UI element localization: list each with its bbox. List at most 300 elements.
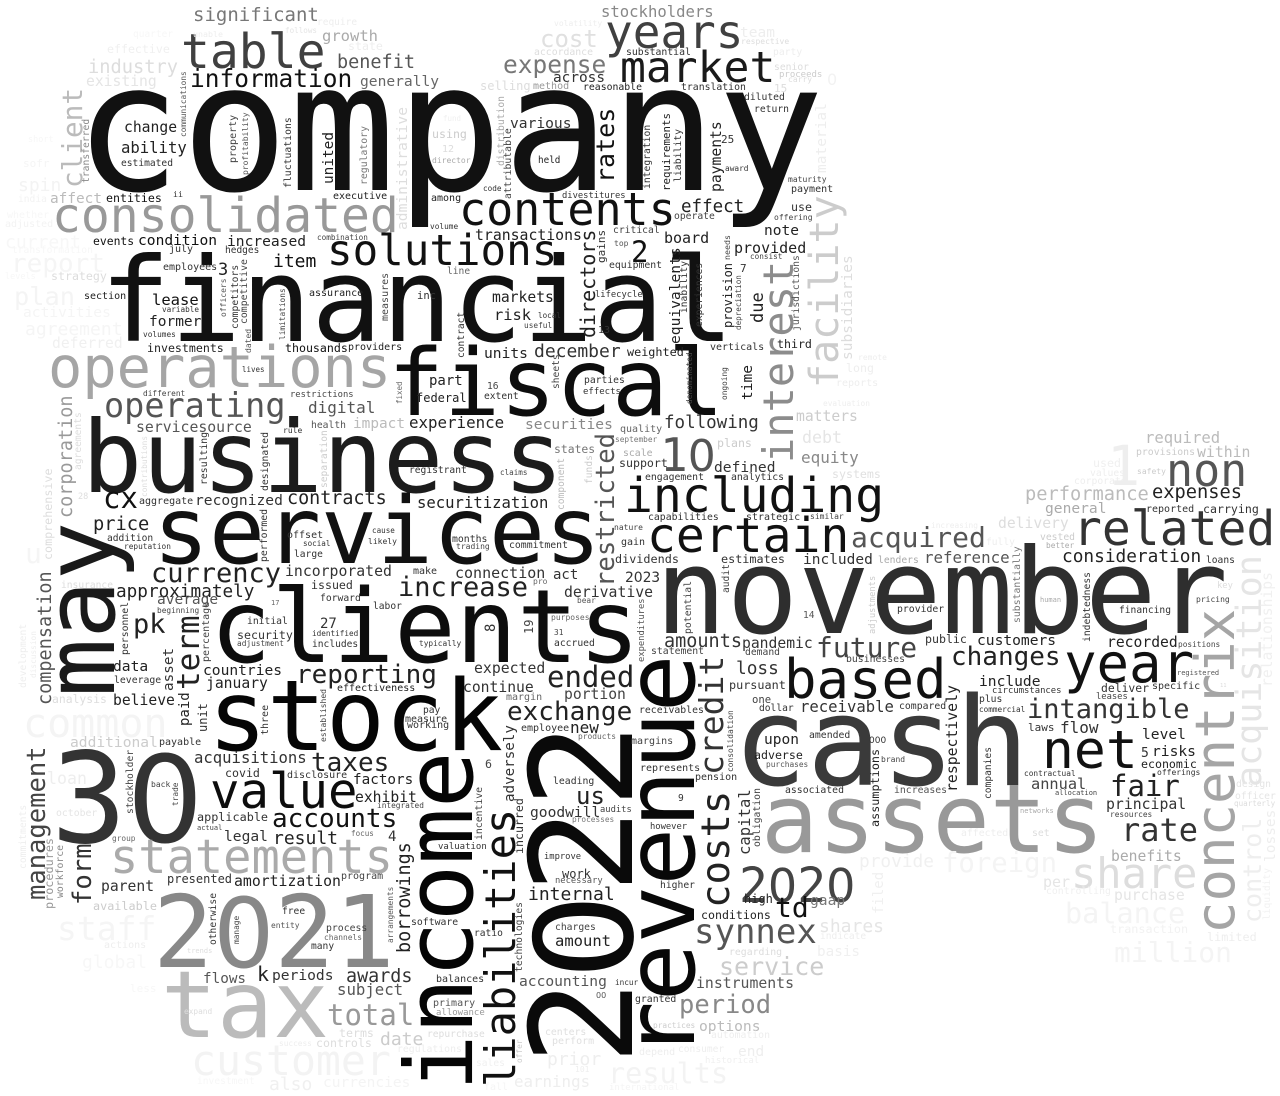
small terms: top centre: diluted (744, 92, 785, 103)
small terms: middle centre: expected (474, 660, 545, 677)
small terms: middle centre: capabilities (648, 512, 719, 523)
small terms: middle centre: trading (456, 542, 490, 551)
small terms: bottom left: controls (316, 1036, 372, 1050)
small terms: bottom centre: international (609, 1083, 679, 1093)
small terms: middle left: effectiveness (337, 683, 415, 694)
small terms: bottom centre: incur (615, 978, 639, 987)
small terms: bottom left: also (269, 1074, 312, 1095)
small terms: middle left: initial (247, 616, 288, 627)
small terms: bottom left: amortization (234, 873, 341, 890)
small terms: top centre: markets (492, 289, 554, 306)
small terms: top left: lease (152, 291, 199, 309)
small terms: right side: expenses (1152, 482, 1242, 503)
medium terms, vertical: term (171, 615, 207, 690)
small terms: bottom centre: products (578, 732, 616, 741)
word: 30: 30 (51, 725, 203, 872)
medium terms, horizontal: plan (14, 282, 75, 311)
small terms: bottom left: awards (346, 966, 412, 987)
small terms: top centre: divestitures (562, 191, 626, 201)
small terms: middle centre: audit (721, 564, 732, 593)
small terms: right side: corporate (1074, 476, 1127, 487)
medium terms, horizontal: statements (110, 830, 393, 885)
small terms: middle left (18, 365, 548, 742)
small terms: middle centre: statement (651, 646, 704, 657)
small terms: top left: affect (50, 191, 102, 207)
small terms: middle left: approximately (116, 582, 254, 602)
small terms: bottom centre: software (411, 917, 458, 928)
small terms: bottom left: global (82, 952, 147, 973)
small terms: right side: circumstances (992, 686, 1061, 696)
small terms: bottom left: expand (184, 1007, 212, 1016)
small terms: top centre: award (725, 164, 748, 173)
small terms: bottom centre: offer (515, 1039, 524, 1063)
medium terms, horizontal: information (190, 64, 352, 93)
small terms: right side: per (1043, 873, 1070, 891)
word: consolidated: consolidated (52, 188, 399, 244)
small terms: top left: july (169, 244, 193, 255)
small terms: right side (736, 353, 1279, 960)
small terms: top centre: inability (679, 261, 690, 313)
medium terms, horizontal: 10 (660, 428, 716, 482)
medium terms, horizontal: acquired (851, 521, 986, 554)
small terms: bottom centre: ratio (474, 928, 503, 939)
medium terms, horizontal: currency (151, 558, 281, 589)
small terms: top centre: equivalents (667, 247, 684, 344)
medium terms, horizontal: years (605, 5, 743, 59)
small terms: middle centre: expenditures (637, 598, 647, 662)
small terms: top centre: equipment (609, 260, 662, 271)
small terms: right side: upon (764, 732, 799, 748)
small terms: bottom left: stockholder (125, 750, 136, 814)
small terms: middle centre: following (664, 413, 759, 433)
small terms: right side: assumptions (868, 749, 882, 827)
word: clients: clients (210, 568, 640, 687)
small terms: bottom centre: options (699, 1018, 761, 1035)
small terms: bottom centre: amount (555, 932, 611, 950)
word: concentrix: concentrix (1184, 609, 1247, 934)
small terms: right side: liquidity (1262, 868, 1273, 920)
small terms: top left: growth (322, 27, 378, 45)
small terms: right side: key (1217, 581, 1233, 591)
small terms: middle left: personnel (120, 602, 131, 655)
small terms: right side: principal (1106, 796, 1186, 813)
small terms: right side: obligation (752, 788, 763, 847)
small terms: top centre: selling (480, 79, 531, 93)
small terms: top centre: board (664, 229, 709, 247)
word: assets: assets (761, 765, 1104, 875)
small terms: top centre: december (534, 341, 621, 362)
medium terms, horizontal: us (576, 782, 605, 810)
small terms: right side: evaluation (823, 399, 870, 408)
small terms: middle left: believe (113, 692, 175, 709)
medium terms, horizontal: td (775, 891, 809, 924)
small terms: middle centre: effects (583, 387, 621, 397)
small terms: bottom left: commitments (18, 805, 29, 869)
small terms: top centre: liability (673, 129, 684, 182)
small terms: bottom left: additional (70, 734, 158, 751)
small terms: top centre: units (484, 345, 528, 362)
small terms: top left: item (273, 251, 316, 272)
small terms: top centre: requirements (660, 113, 673, 191)
small terms: bottom left: result (273, 828, 338, 849)
small terms: top centre: 0 (827, 70, 837, 89)
small terms: top left: regulatory (359, 126, 370, 185)
small terms: top left: communications (179, 71, 188, 137)
small terms: right side: required (1145, 429, 1220, 447)
small terms: middle centre: analytics (731, 472, 784, 483)
small terms: right side: include (979, 673, 1041, 690)
small terms: right side: companies (983, 747, 994, 799)
small terms: top centre: weighted (627, 345, 684, 359)
small terms: right side: within (1197, 444, 1250, 461)
small terms: top left: inc (417, 290, 436, 302)
small terms: right side: limited (1207, 930, 1257, 944)
medium terms, horizontal: including (624, 468, 884, 524)
small terms: top left: whether (7, 210, 49, 221)
small terms: top centre: top (614, 239, 629, 248)
small terms: bottom centre: adversely (502, 725, 518, 802)
small terms: middle left: restrictions (290, 390, 354, 400)
small terms: middle left: aggregate (139, 496, 193, 507)
small terms: middle left: insurance (61, 580, 113, 591)
small terms: right side: risks (1152, 743, 1196, 760)
small terms: top left: transferred (81, 119, 92, 183)
small terms: right side: affected (961, 828, 1008, 839)
small terms: middle left: beginning (157, 606, 199, 615)
medium terms, horizontal: 2 (631, 235, 648, 269)
word: company: company (74, 25, 824, 232)
small terms: middle centre: securities (525, 416, 613, 433)
small terms: right side: amended (809, 730, 850, 741)
medium terms, vertical: management (22, 746, 52, 900)
small terms: middle centre: amounts (664, 631, 742, 652)
small terms: middle centre: purposes (551, 613, 590, 622)
small terms: top centre: 12 (442, 144, 454, 155)
medium terms, horizontal: customer (191, 1036, 391, 1085)
small terms: right side: compared (899, 701, 946, 712)
small terms: bottom left: workforce (55, 845, 66, 898)
small terms: middle centre: september (615, 435, 658, 444)
small terms: top centre: consist (750, 252, 782, 261)
small terms: bottom left: date (380, 1029, 423, 1050)
small terms: bottom centre: internal (528, 884, 615, 905)
small terms: middle left: discussion (29, 631, 38, 678)
small terms: top centre: method (533, 81, 569, 92)
small terms: right side: losses (1263, 810, 1279, 862)
medium terms, horizontal: staff (57, 909, 156, 948)
small terms: middle centre: component (556, 458, 567, 510)
small terms: middle left: recognized (195, 492, 283, 509)
small terms: right side: carrying (1203, 502, 1259, 516)
medium terms, vertical: borrowings (394, 842, 415, 953)
small terms: middle left: digital (308, 398, 375, 417)
small terms: middle left: large (294, 549, 323, 560)
small terms: top centre: jurisdictions (791, 255, 802, 331)
small terms: right side: officer (1235, 791, 1276, 802)
small terms: middle left: incorporated (285, 563, 392, 580)
small terms: top left: change (124, 119, 177, 136)
small terms: right side: 000 (869, 736, 886, 746)
small terms: bottom left: channels (324, 933, 362, 942)
small terms: top left: events (93, 234, 134, 248)
medium terms, horizontal: certain (647, 508, 849, 564)
small terms: middle left: separation (319, 430, 330, 488)
medium terms, horizontal: based (784, 648, 947, 711)
small terms: bottom centre: 101 (575, 1065, 590, 1074)
small terms: right side: general (1045, 500, 1107, 517)
small terms: middle centre: engagement (645, 472, 704, 483)
small terms: middle centre: equity (801, 448, 859, 467)
small terms: middle centre: scale (623, 448, 653, 459)
small terms: middle left: designated (260, 432, 271, 491)
small terms: top left: condition (138, 232, 217, 249)
small terms: right side: substantially (1012, 546, 1023, 623)
small terms: right side: laws (1028, 721, 1054, 734)
small terms: top centre: 25 (721, 133, 734, 146)
small terms: middle left: health (311, 420, 346, 431)
small terms: middle centre: margin (506, 692, 542, 703)
medium terms, horizontal: cx (103, 481, 138, 515)
small terms: top centre: return (754, 104, 789, 115)
small terms: middle centre: extent (484, 391, 519, 402)
small terms: top centre: fund (443, 114, 461, 123)
medium terms, horizontal: market (620, 43, 775, 93)
small terms: top left: profitability (241, 112, 250, 175)
small terms: bottom centre: automation (711, 1030, 770, 1041)
small terms: top left: dated (244, 329, 253, 353)
small terms: top centre: team (740, 25, 775, 41)
small terms: bottom centre: historical (705, 1056, 759, 1066)
medium terms, vertical: control (1238, 818, 1267, 923)
small terms: right side: provider (897, 604, 944, 615)
medium terms, horizontal: table (181, 24, 326, 80)
small terms: right side: recorded (1107, 634, 1178, 651)
small terms: top left: administrative (394, 107, 411, 230)
small terms: top centre: party (773, 47, 802, 58)
word: income: income (386, 751, 495, 1091)
medium terms, horizontal: total (327, 998, 414, 1032)
medium terms, horizontal: cost (540, 25, 598, 53)
small terms: middle left: resulting (199, 432, 210, 485)
small terms: middle left: identified (312, 629, 358, 638)
small terms: top left: unable (193, 29, 223, 39)
small terms: top centre: 7 (740, 262, 747, 275)
small terms: bottom left: factors (353, 772, 413, 788)
small terms: right side: reported (1146, 504, 1194, 515)
small terms: bottom centre: prior (547, 1049, 601, 1070)
small terms: bottom left: group (112, 834, 136, 843)
small terms: middle centre: part (429, 373, 463, 389)
small terms: right side: reference (924, 548, 1010, 567)
small terms: bottom centre: high (744, 892, 773, 906)
small terms: right side: positions (1178, 640, 1220, 649)
medium terms, horizontal: value (210, 763, 358, 820)
small terms: right side: remote (858, 353, 887, 362)
small terms: bottom centre: instruments (696, 975, 794, 992)
small terms: top centre: transactions (475, 227, 582, 244)
word: tax: tax (161, 951, 329, 1059)
small terms: bottom left: manage (232, 916, 241, 944)
small terms: bottom left: many (311, 941, 334, 952)
small terms: right side: capital (736, 789, 754, 855)
small terms: right side: flow (1060, 718, 1099, 737)
small terms: top left: transformation (12, 245, 93, 256)
small terms: bottom left: program (341, 871, 383, 882)
small terms: right side: specific (1152, 681, 1200, 692)
small terms: middle centre: funds (584, 455, 595, 484)
small terms: bottom centre: necessary (555, 876, 603, 886)
small terms: top left: competitors (230, 265, 241, 329)
small terms: middle centre: claims (500, 468, 527, 477)
small terms: right side: annual (1031, 775, 1086, 793)
small terms: middle centre: demand (745, 647, 780, 658)
small terms: middle left: analysis (52, 692, 107, 706)
small terms: middle left: development (18, 624, 29, 688)
small terms: top left: combination (317, 233, 368, 242)
small terms: middle left: make (413, 566, 437, 577)
small terms: right side: 5 (1141, 746, 1149, 761)
small terms: top centre: time (740, 365, 756, 400)
small terms: right side: filed (871, 872, 887, 914)
small terms: top left: benefit (337, 52, 415, 73)
small terms: middle centre: one (752, 694, 771, 706)
small terms: top left: activities (23, 304, 111, 321)
small terms: middle left: price (93, 514, 149, 535)
small terms: top centre: gains (595, 230, 608, 263)
word: may: may (24, 522, 137, 697)
small terms: bottom centre: earnings (514, 1072, 590, 1091)
small terms: right side: provide (859, 851, 934, 872)
small terms: bottom centre: conditions (701, 908, 771, 922)
small terms: middle centre: connection (455, 564, 545, 582)
small terms: bottom left: presented (167, 872, 232, 886)
word: cash: cash (733, 672, 1029, 815)
small terms: right side: delivery (998, 515, 1069, 532)
small terms: right side: relationships (1259, 572, 1276, 687)
word: stock: stock (208, 660, 503, 774)
small terms: middle centre: receivable (800, 698, 894, 716)
small terms: right side: indicate (820, 931, 866, 942)
small terms: top centre: attributable (503, 128, 514, 199)
small terms: top centre: director (432, 156, 471, 165)
small terms: top centre: various (510, 115, 572, 132)
small terms: bottom centre: fall (484, 1082, 508, 1093)
medium terms, horizontal: related (1073, 501, 1275, 557)
small terms: bottom centre: represents (640, 763, 700, 774)
small terms: middle left: agreements (73, 412, 84, 470)
small terms: top left: competitive (239, 259, 250, 324)
small terms: top left: increased (227, 233, 306, 250)
small terms: bottom centre: work (562, 867, 592, 881)
small terms: middle left: 28 (78, 492, 88, 502)
small terms: top left: assurance (309, 288, 363, 299)
small terms: bottom left: applicable (197, 810, 268, 824)
small terms: bottom centre: depend (639, 1047, 675, 1058)
word: 2021: 2021 (153, 874, 395, 991)
small terms: bottom centre: perform (552, 1036, 594, 1047)
medium terms, horizontal: year (1064, 632, 1194, 695)
small terms: bottom left: legal (224, 828, 268, 845)
small terms: top left: strategy (51, 269, 107, 283)
medium terms, horizontal: service (719, 952, 824, 981)
small terms: top centre: contract (456, 312, 467, 358)
medium terms, horizontal: rate (1121, 811, 1198, 849)
small terms: right side: level (1142, 726, 1186, 743)
small terms: middle centre: dividends (615, 552, 679, 566)
small terms: middle left: average (157, 592, 218, 608)
small terms: top left: spin (18, 175, 61, 196)
small terms: bottom centre: centers (545, 1027, 586, 1038)
small terms: right side: public (925, 632, 967, 646)
small terms: bottom left: trends (187, 947, 212, 955)
small terms: right side: 11 (1220, 683, 1227, 689)
small terms: top centre: third (777, 337, 812, 351)
small terms: middle left: countries (203, 662, 282, 679)
medium terms, horizontal: share (1071, 849, 1197, 898)
small terms: middle centre: included (803, 552, 873, 568)
small terms: bottom centre: accounting (519, 973, 607, 990)
small terms: bottom left: less (130, 982, 156, 995)
small terms: top left: generally (360, 73, 439, 90)
medium terms, horizontal: 2020 (739, 858, 855, 914)
small terms: right side: purchase (1114, 887, 1185, 904)
small terms: bottom left: terms (339, 1026, 374, 1040)
small terms: bottom centre: balances (436, 974, 484, 985)
small terms: middle left: likely (368, 537, 397, 546)
small terms: top left: investments (147, 341, 224, 355)
small terms: bottom centre: repurchase (427, 1029, 485, 1040)
medium terms, vertical: rates (591, 108, 620, 183)
small terms: bottom centre: improve (544, 852, 581, 862)
small terms: middle centre: states (554, 442, 595, 456)
small terms: top centre: risk (494, 306, 532, 324)
small terms: middle centre: matters (796, 408, 858, 425)
small terms: top centre: local (538, 311, 561, 320)
small terms: top centre: depreciation (734, 275, 743, 330)
small terms: middle left: social (303, 539, 330, 548)
small terms: right side: vested (1040, 532, 1075, 543)
small terms: middle centre: 16 (487, 381, 499, 392)
small terms: top centre: needs (722, 235, 732, 260)
small terms: middle centre: dollar (759, 703, 794, 714)
small terms: middle left: typically (419, 639, 462, 648)
small terms: top left: measures (380, 273, 391, 321)
small terms: bottom left: periods (272, 967, 334, 984)
small terms: right side: safety (1137, 467, 1166, 476)
small terms: top left: industry (88, 57, 178, 78)
small terms: bottom left: investment (197, 1076, 255, 1087)
small terms: middle left: labor (373, 601, 402, 612)
small terms: right side: customers (977, 632, 1056, 649)
small terms: top centre: respective (741, 37, 789, 46)
small terms: right side: contractual (1024, 769, 1076, 778)
small terms: middle centre: consolidation (726, 710, 735, 772)
small terms: top centre: code (483, 184, 502, 193)
small terms: middle centre: accrued (554, 638, 595, 649)
small terms: bottom centre: 6 (485, 757, 492, 771)
small terms: bottom left (18, 734, 424, 1095)
word: liabilities: liabilities (476, 809, 525, 1087)
small terms: middle centre: commitment (509, 540, 568, 551)
word: interest: interest (754, 261, 803, 463)
small terms: middle left: contracts (287, 488, 387, 509)
small terms: right side: economic (1141, 757, 1197, 771)
small terms: middle left: security (237, 628, 293, 642)
small terms: middle centre: continue (463, 679, 534, 696)
small terms: top centre: ongoing (720, 367, 729, 400)
small terms: bottom centre: margins (631, 736, 673, 747)
small terms: right side: increasing (931, 521, 978, 530)
